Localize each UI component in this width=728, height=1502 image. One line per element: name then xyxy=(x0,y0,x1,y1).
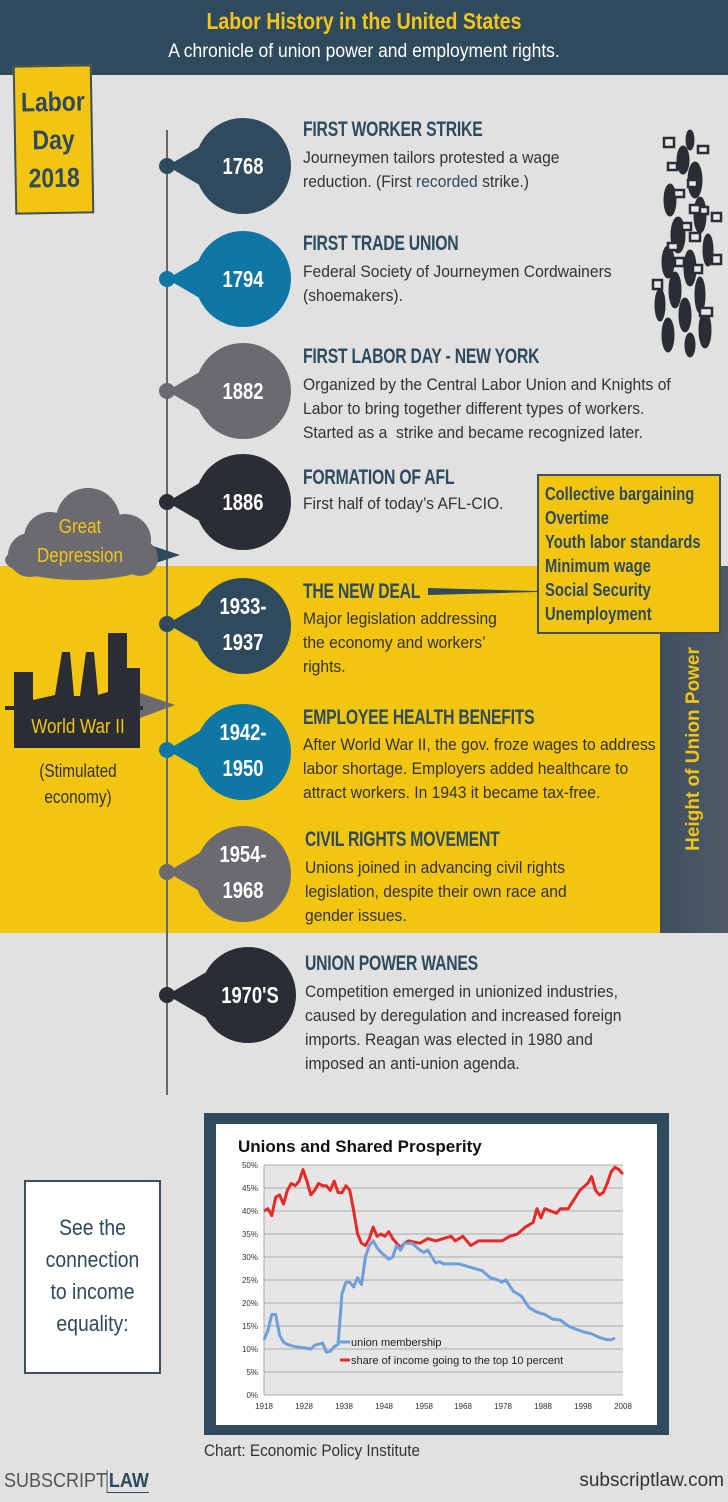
chart: unions and shared prosperity: 1978 xyxy=(494,1402,512,1411)
event: new deal: the economy and workers’ xyxy=(303,633,486,652)
text: (Stimulated economy): (Stimulated xyxy=(39,761,117,781)
callout: new deal list: Overtime xyxy=(545,508,609,528)
bubble 1882: 1882 xyxy=(223,379,263,405)
chart: unions and shared prosperity: 5% xyxy=(246,1368,258,1377)
callout: new deal list: Social Security xyxy=(545,580,651,600)
chart: unions and shared prosperity: 2008 xyxy=(614,1402,632,1411)
event: union power wanes: UNION POWER WANES xyxy=(305,952,478,975)
callout: new deal list: Unemployment xyxy=(545,604,652,624)
callout: see the connection: connection xyxy=(46,1247,139,1272)
Labor Day 2018 box: Labor xyxy=(21,86,85,118)
event: first trade union: Federal Society of Journeymen Cordwainers xyxy=(303,262,612,281)
yellow band: height of union power xyxy=(0,566,660,933)
event: first trade union xyxy=(303,232,612,305)
chart: unions and shared prosperity: 15% xyxy=(242,1322,258,1331)
event: civil rights movement: legislation, despite their own race and xyxy=(305,882,567,901)
event: first trade union: (shoemakers). xyxy=(303,286,403,305)
event: formation of AFL xyxy=(303,466,504,513)
title: Labor History in the United States xyxy=(206,8,522,34)
chart: unions and shared prosperity: 1998 xyxy=(574,1402,592,1411)
event: civil rights movement: CIVIL RIGHTS MOVEMENT xyxy=(305,828,499,851)
event: employee health benefits: labor shortage. Employers added healthcare to xyxy=(303,759,628,778)
side bar: Height of Union Power xyxy=(660,566,728,933)
callout: new deal list: Minimum wage xyxy=(545,556,651,576)
icon: factory World War II xyxy=(5,633,175,748)
callout: new deal list xyxy=(537,474,721,634)
event: first worker strike: FIRST WORKER STRIKE xyxy=(303,118,482,141)
icon: factory World War II: World War II xyxy=(31,715,125,737)
callout: see the connection xyxy=(24,1180,161,1374)
bubble 1886 xyxy=(159,454,291,550)
footer url: subscriptlaw.com xyxy=(579,1470,724,1491)
bubble 1954-1968 xyxy=(159,826,291,922)
event: employee health benefits: After World War II, the gov. froze wages to address xyxy=(303,735,656,754)
bubble 1768 xyxy=(159,118,291,214)
event: formation of AFL: FORMATION OF AFL xyxy=(303,466,454,489)
Labor Day 2018 box: Day xyxy=(32,125,75,155)
event: first labor day: Labor to bring together different types of workers. xyxy=(303,399,644,418)
chart: unions and shared prosperity: 1928 xyxy=(295,1402,313,1411)
chart: unions and shared prosperity: union membership xyxy=(351,1337,442,1349)
chart: unions and shared prosperity: 1958 xyxy=(415,1402,433,1411)
event: first trade union: FIRST TRADE UNION xyxy=(303,232,458,255)
bubble 1933-1937 xyxy=(159,578,291,674)
callout: see the connection: See the xyxy=(59,1215,126,1240)
chart: unions and shared prosperity: 35% xyxy=(242,1230,258,1239)
icon: crowd of protesters xyxy=(653,130,721,357)
event: first worker strike: reduction. (First recorded strike.) xyxy=(303,172,529,191)
text: (Stimulated economy): economy) xyxy=(44,787,112,807)
event: union power wanes: caused by deregulation and increased foreign xyxy=(305,1006,622,1025)
bubble 1954-1968: 1954- xyxy=(219,842,267,868)
Labor Day 2018 box: 2018 xyxy=(28,163,80,193)
event: first worker strike xyxy=(303,118,559,191)
chart: unions and shared prosperity: share of income going to the top 10 percent xyxy=(351,1355,563,1367)
callout: see the connection: equality: xyxy=(56,1311,129,1336)
event: employee health benefits: attract workers. In 1943 it became tax-free. xyxy=(303,783,600,802)
bubble 1794: 1794 xyxy=(223,267,264,293)
event: employee health benefits xyxy=(303,706,656,802)
subtitle: A chronicle of union power and employment rights. xyxy=(168,41,560,62)
event: employee health benefits: EMPLOYEE HEALTH BENEFITS xyxy=(303,706,534,729)
bubble 1942-1950: 1950 xyxy=(223,756,263,782)
bubble 1970s xyxy=(159,947,296,1043)
event: first worker strike: Journeymen tailors protested a wage xyxy=(303,148,559,167)
callout: see the connection: to income xyxy=(51,1279,134,1304)
chart: unions and shared prosperity: Unions and Shared Prosperity xyxy=(238,1137,482,1156)
event: new deal: THE NEW DEAL xyxy=(303,580,420,603)
event: first labor day: Organized by the Central Labor Union and Knights of xyxy=(303,375,671,394)
event: union power wanes: imposed an anti-union agenda. xyxy=(305,1054,520,1073)
event: civil rights movement xyxy=(305,828,567,925)
bubble 1954-1968: 1968 xyxy=(223,878,263,904)
icon: Great Depression cloud: Great xyxy=(59,515,102,537)
timeline xyxy=(5,118,722,1095)
event: civil rights movement: Unions joined in advancing civil rights xyxy=(305,858,565,877)
callout: new deal list: Youth labor standards xyxy=(545,532,701,552)
Labor Day 2018 box xyxy=(13,64,94,215)
chart: unions and shared prosperity: 1938 xyxy=(335,1402,353,1411)
chart: unions and shared prosperity: 10% xyxy=(242,1345,258,1354)
arrow: new deal connector xyxy=(428,588,537,595)
bubble 1942-1950 xyxy=(159,704,291,800)
event: union power wanes: Competition emerged in unionized industries, xyxy=(305,982,618,1001)
bubble 1794 xyxy=(159,231,291,327)
chart: unions and shared prosperity: 1948 xyxy=(375,1402,393,1411)
bubble 1970s: 1970'S xyxy=(221,983,279,1009)
event: formation of AFL: First half of today’s AFL-CIO. xyxy=(303,494,504,513)
chart caption: Chart: Economic Policy Institute xyxy=(204,1441,420,1460)
header bar xyxy=(0,0,728,75)
event: new deal xyxy=(303,580,497,676)
event: union power wanes: imports. Reagan was elected in 1980 and xyxy=(305,1030,593,1049)
chart: unions and shared prosperity: 40% xyxy=(242,1207,258,1216)
bubble 1882 xyxy=(159,343,291,439)
chart: unions and shared prosperity: 20% xyxy=(242,1299,258,1308)
callout: new deal list: Collective bargaining xyxy=(545,484,694,504)
event: first labor day: Started as a strike and became recognized later. xyxy=(303,423,643,442)
bubble 1942-1950: 1942- xyxy=(219,720,267,746)
event: new deal: rights. xyxy=(303,657,346,676)
bubble 1933-1937: 1933- xyxy=(219,594,267,620)
chart: unions and shared prosperity: 0% xyxy=(246,1391,258,1400)
chart: unions and shared prosperity: 25% xyxy=(242,1276,258,1285)
logo: SUBSCRIPT LAW: SUBSCRIPTLAW xyxy=(4,1470,149,1492)
bubble 1886: 1886 xyxy=(223,490,263,516)
bubble 1768: 1768 xyxy=(223,154,263,180)
chart: unions and shared prosperity: 1968 xyxy=(454,1402,472,1411)
chart: unions and shared prosperity: 45% xyxy=(242,1184,258,1193)
event: union power wanes xyxy=(305,952,622,1073)
chart: unions and shared prosperity: 1988 xyxy=(534,1402,552,1411)
text: (Stimulated economy) xyxy=(39,761,117,807)
icon: Great Depression cloud xyxy=(5,488,180,580)
chart: unions and shared prosperity: 30% xyxy=(242,1253,258,1262)
icon: Great Depression cloud: Depression xyxy=(37,544,123,566)
event: new deal: Major legislation addressing xyxy=(303,609,497,628)
bubble 1933-1937: 1937 xyxy=(223,630,263,656)
event: first labor day xyxy=(303,345,671,442)
chart: unions and shared prosperity: 1918 xyxy=(255,1402,273,1411)
chart: unions and shared prosperity: 50% xyxy=(242,1161,258,1170)
side bar: Height of Union Power: Height of Union Power xyxy=(683,647,704,851)
event: civil rights movement: gender issues. xyxy=(305,906,407,925)
event: first labor day: FIRST LABOR DAY - NEW YORK xyxy=(303,345,539,368)
